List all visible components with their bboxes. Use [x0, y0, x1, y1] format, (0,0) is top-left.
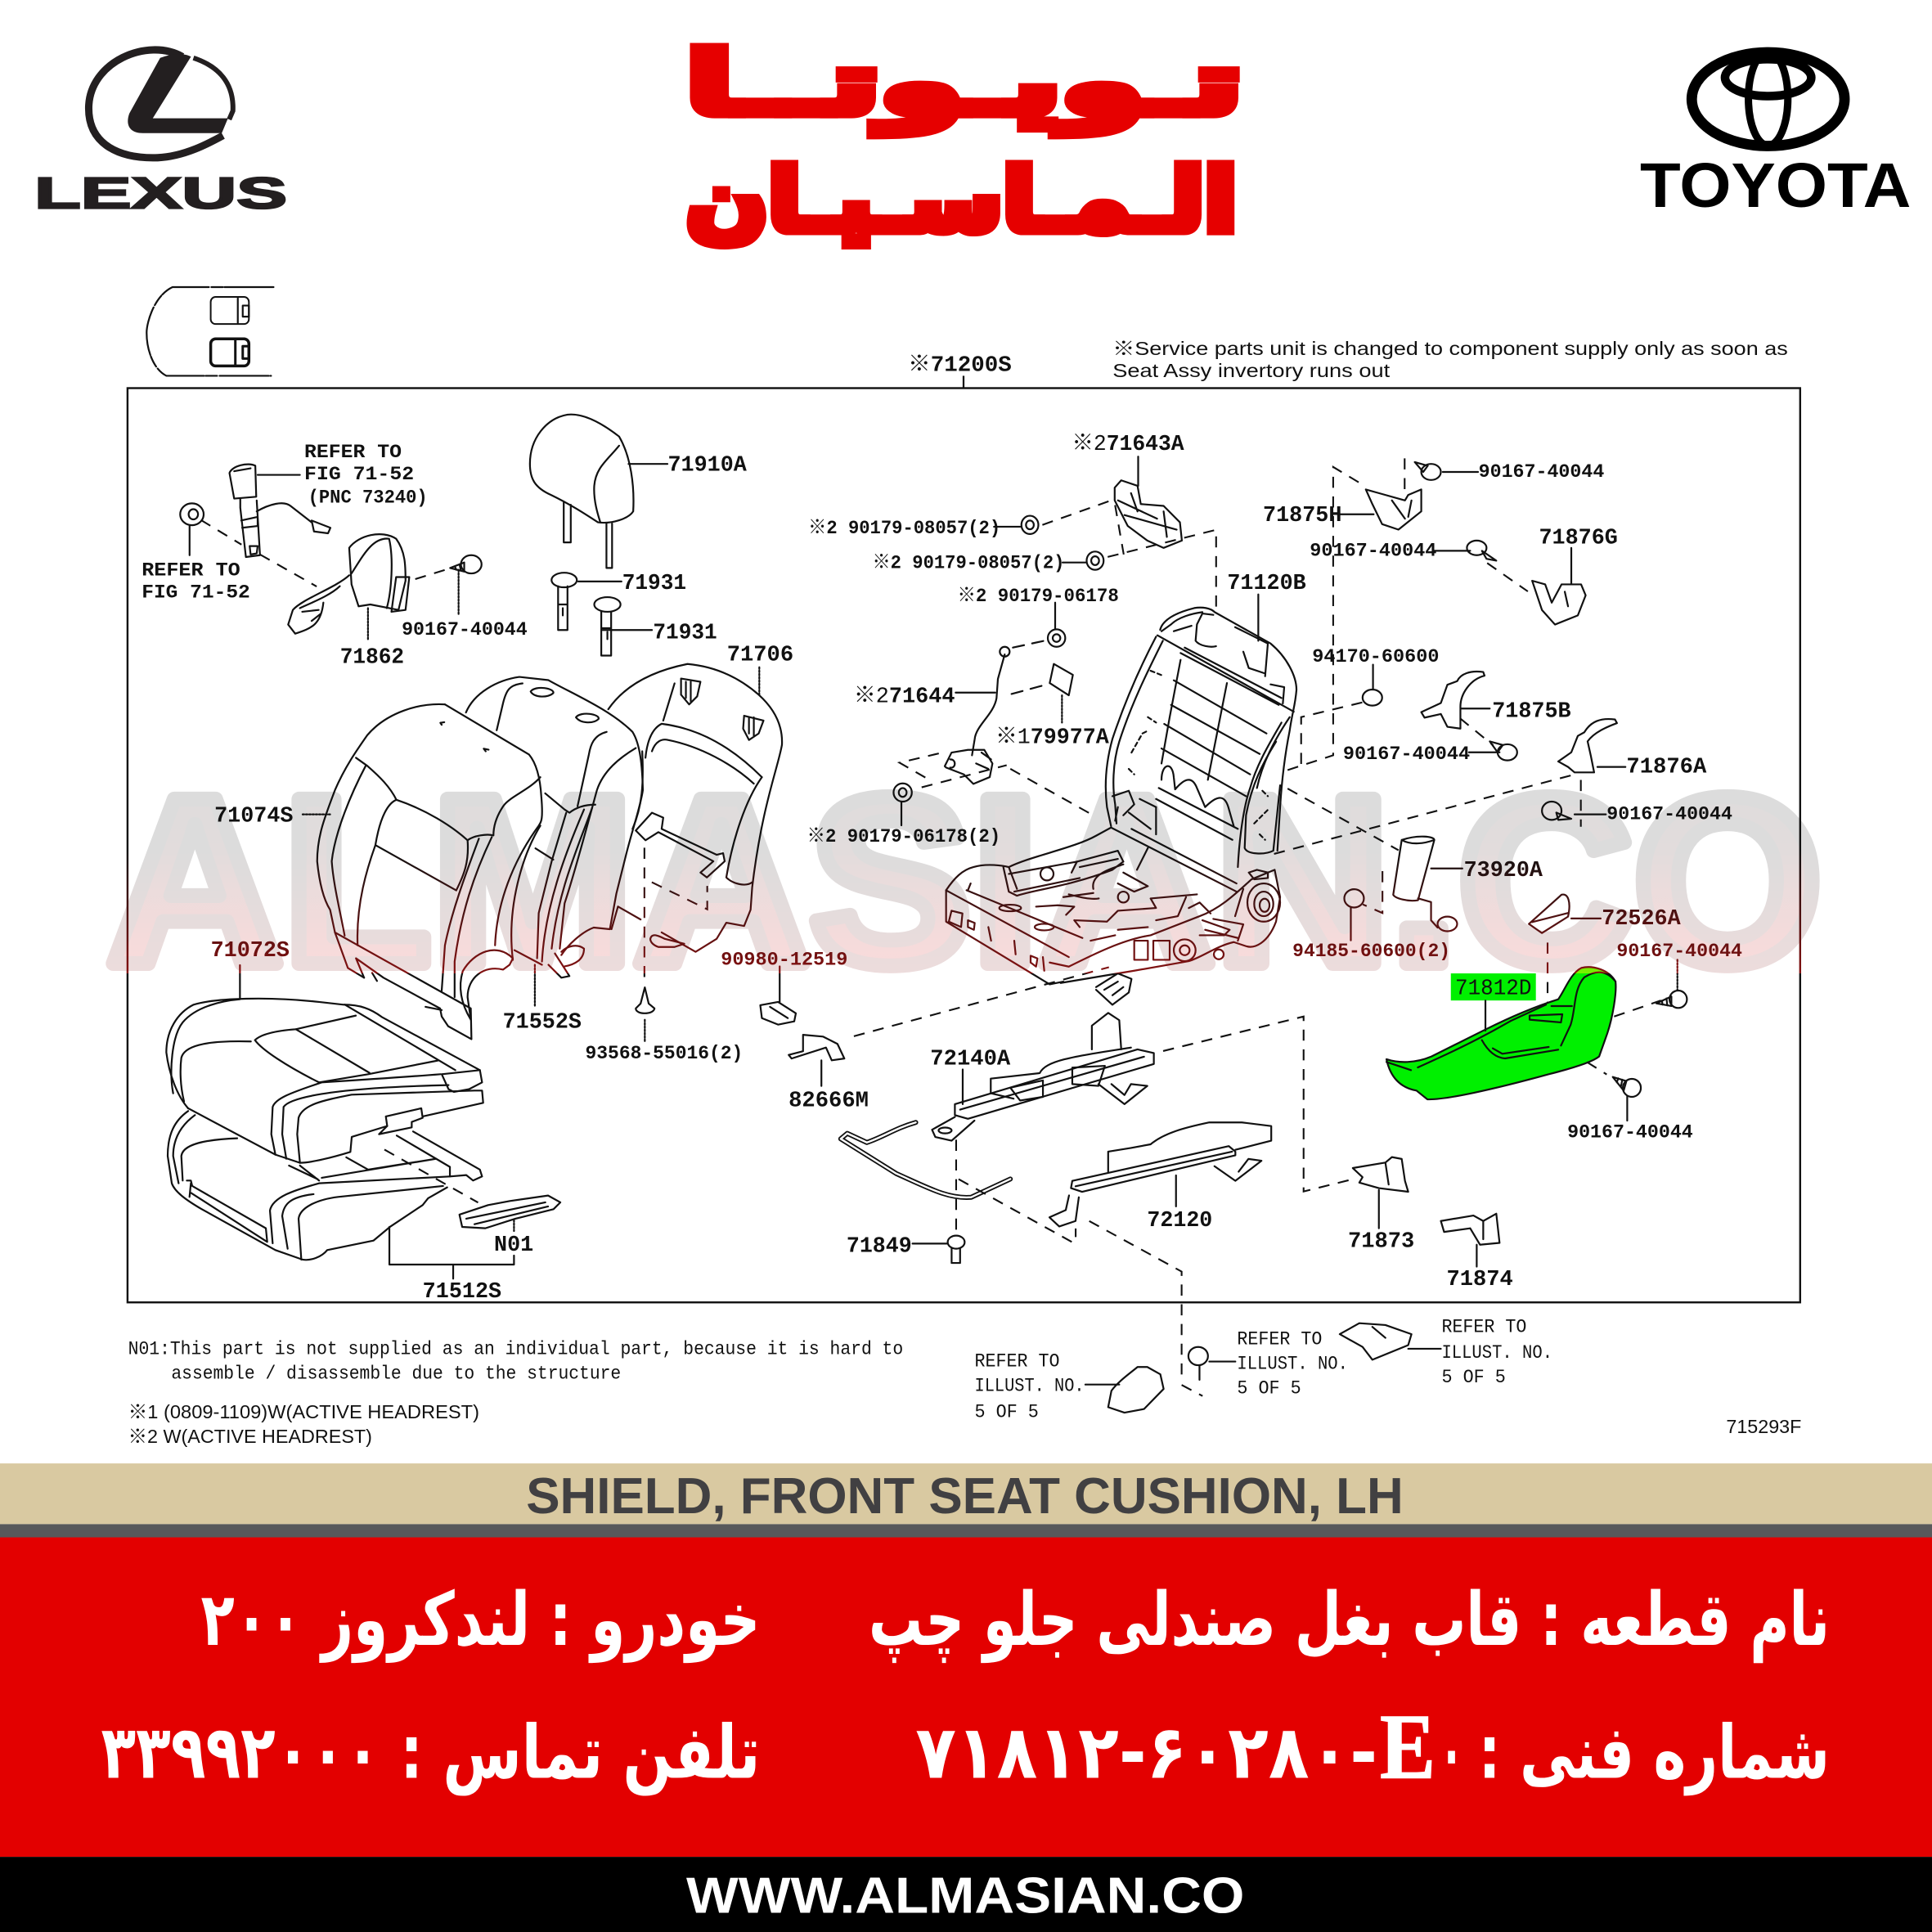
diagram code: 715293F	[1726, 1416, 1801, 1437]
part: seat back covers 71074S, 71552S, 71706	[214, 642, 847, 1065]
part: 71910A headrest and 71931 guides: 71931	[653, 620, 717, 645]
callouts: refer to illustration 5 of 5 parts: 5 OF 5	[975, 1402, 1039, 1423]
icon: seat location inset	[146, 287, 273, 375]
part: brackets 71875H, 71876G, 71875B, 71876A with bolts: 90167-40044	[1343, 744, 1470, 766]
callouts: refer to illustration 5 of 5 parts	[975, 1317, 1552, 1423]
part: seat tracks 72140A, 72120 and wire 71849: 72120	[1147, 1208, 1212, 1233]
logo: red Persian brand wordmark: تـویـوتــا	[686, 34, 1242, 135]
note: service parts: ※Service parts unit is changed to component supply only as soon as	[1112, 338, 1788, 359]
panel: red Persian details	[0, 1538, 1932, 1857]
part: brackets 71875H, 71876G, 71875B, 71876A with bolts	[1263, 458, 1732, 827]
part: brackets 71875H, 71876G, 71875B, 71876A with bolts: 90167-40044	[1310, 541, 1436, 562]
panel: red Persian details: تلفن تماس : ۳۳۹۹۲۰۰۰	[101, 1710, 760, 1796]
logo: Lexus: LEXUS	[34, 169, 287, 218]
panel: red Persian details: خودرو : لندکروز ۲۰۰	[201, 1577, 760, 1664]
part: seat belt buckle and 71862 cover: REFER TO	[142, 560, 240, 582]
callouts: refer to illustration 5 of 5 parts: ILLUST. NO.	[1237, 1355, 1348, 1376]
note: service parts: Seat Assy invertory runs out	[1112, 360, 1391, 381]
notes: N01 and footnotes: N01:This part is not supplied as an individual part, because it is hard to	[128, 1340, 903, 1361]
part: seat frame 71120B: 71120B	[1227, 571, 1306, 596]
part: 71873 and 71874 clips: 71873	[1348, 1229, 1414, 1254]
part: 71873 and 71874 clips	[1348, 1157, 1513, 1292]
part: brackets 71875H, 71876G, 71875B, 71876A with bolts: 71875H	[1263, 503, 1341, 528]
part: 71910A headrest and 71931 guides: 71931	[622, 571, 686, 596]
part: 71643A bracket with nuts: ※2 90179-08057(2)	[808, 519, 1000, 540]
part: mounting bolts for 71812D: 90167-40044	[1616, 941, 1742, 963]
part: seat belt buckle and 71862 cover: FIG 71-52	[142, 583, 250, 604]
notes: N01 and footnotes: assemble / disassemble due to the structure	[171, 1364, 621, 1386]
part: seat frame 71120B	[900, 467, 1577, 1004]
footer: website	[0, 1857, 1932, 1932]
part: 71873 and 71874 clips: 71874	[1446, 1267, 1513, 1292]
part: seat back covers 71074S, 71552S, 71706: 71074S	[214, 804, 294, 829]
footer: website: WWW.ALMASIAN.CO	[686, 1868, 1244, 1925]
label: 71200S: ※71200S	[908, 353, 1012, 378]
part: brackets 71875H, 71876G, 71875B, 71876A with bolts: 71876G	[1539, 525, 1618, 550]
part: highlighted 71812D shield, front seat cushion	[1386, 967, 1615, 1099]
callouts: refer to illustration 5 of 5 parts: ILLUST. NO.	[1441, 1343, 1552, 1364]
part: seat cushions 71072S, 71512S and N01: N01	[494, 1233, 533, 1258]
part: 71643A bracket with nuts: ※2 90179-08057(2)	[873, 553, 1065, 574]
part: seat back covers 71074S, 71552S, 71706: 71706	[727, 642, 793, 667]
watermark: ALMASIAN.CO: ALMASIAN.CO	[107, 747, 1822, 1014]
part: seat cushions 71072S, 71512S and N01	[166, 938, 560, 1305]
logo: red Persian brand wordmark	[686, 34, 1242, 251]
part: seat belt buckle and 71862 cover: (PNC 73240)	[308, 488, 428, 510]
logo: Toyota: TOYOTA	[1640, 151, 1911, 221]
notes: N01 and footnotes	[128, 1340, 903, 1447]
part: 71644 cable, 79977A card and nuts: ※2 90179-06178(2)	[807, 827, 1000, 848]
part: 73920A side airbag and 72526A cap: 72526A	[1602, 906, 1681, 932]
part: brackets 71875H, 71876G, 71875B, 71876A with bolts: 90167-40044	[1479, 462, 1604, 483]
part: seat back covers 71074S, 71552S, 71706: 93568-55016(2)	[586, 1044, 743, 1065]
notes: N01 and footnotes: ※1 (0809-1109)W(ACTIVE HEADREST)	[128, 1401, 479, 1422]
watermark tint over linework	[99, 850, 1836, 973]
part: 82666M clip and 90980-12519 connector: 82666M	[789, 1089, 869, 1114]
notes: N01 and footnotes: ※2 W(ACTIVE HEADREST)	[128, 1426, 372, 1447]
panel: red Persian details: ۰	[1439, 1710, 1464, 1796]
part: seat cushions 71072S, 71512S and N01: 71072S	[211, 938, 290, 964]
part: seat belt buckle and 71862 cover	[142, 443, 528, 670]
logo: Lexus	[34, 50, 287, 218]
part: seat cushions 71072S, 71512S and N01: 71512S	[423, 1279, 501, 1305]
part: mounting bolts for 71812D	[1567, 941, 1742, 1143]
part: seat belt buckle and 71862 cover: 71862	[340, 645, 404, 670]
part: 71644 cable, 79977A card and nuts: ※179977A	[995, 725, 1109, 750]
band: English part name: SHIELD, FRONT SEAT CUSHION, LH	[526, 1468, 1404, 1525]
panel: red Persian details: E	[1380, 1696, 1436, 1799]
part: brackets 71875H, 71876G, 71875B, 71876A with bolts: 71875B	[1492, 699, 1571, 725]
part: brackets 71875H, 71876G, 71875B, 71876A with bolts: 90167-40044	[1606, 805, 1732, 826]
part: seat tracks 72140A, 72120 and wire 71849: 71849	[847, 1233, 912, 1259]
part: brackets 71875H, 71876G, 71875B, 71876A with bolts: 94170-60600	[1312, 647, 1439, 668]
part: highlighted 71812D shield, front seat cushion: 71812D	[1455, 977, 1531, 1002]
callouts: refer to illustration 5 of 5 parts: 5 OF 5	[1237, 1379, 1301, 1400]
callouts: refer to illustration 5 of 5 parts: ILLUST. NO.	[975, 1377, 1085, 1398]
callouts: refer to illustration 5 of 5 parts: REFER TO	[1441, 1317, 1526, 1338]
callouts: refer to illustration 5 of 5 parts: 5 OF 5	[1441, 1368, 1506, 1389]
note: service parts	[1112, 338, 1788, 381]
part: 73920A side airbag and 72526A cap: 94185-60600(2)	[1292, 941, 1450, 963]
panel: parts diagram frame	[128, 389, 1800, 1302]
part: mounting bolts for 71812D: 90167-40044	[1567, 1122, 1693, 1143]
part: 71643A bracket with nuts	[808, 432, 1184, 574]
part: 71644 cable, 79977A card and nuts: ※271644	[854, 685, 955, 710]
part: seat belt buckle and 71862 cover: REFER TO	[304, 443, 402, 464]
part: seat tracks 72140A, 72120 and wire 71849: 72140A	[930, 1047, 1011, 1072]
part: 71643A bracket with nuts: ※271643A	[1072, 432, 1184, 457]
panel: red Persian details: ۷۱۸۱۲-۶۰۲۸۰-	[915, 1710, 1377, 1796]
part: 71644 cable, 79977A card and nuts: ※2 90179-06178	[957, 586, 1119, 608]
part: 73920A side airbag and 72526A cap	[1292, 837, 1681, 1022]
part: 71910A headrest and 71931 guides	[530, 415, 748, 655]
part: 71910A headrest and 71931 guides: 71910A	[667, 452, 748, 478]
part: seat belt buckle and 71862 cover: FIG 71-52	[304, 465, 414, 486]
band: English part name	[0, 1463, 1932, 1538]
logo: red Persian brand wordmark: الـمـاسـیـان	[686, 151, 1237, 251]
callouts: refer to illustration 5 of 5 parts: REFER TO	[975, 1352, 1059, 1373]
part: seat belt buckle and 71862 cover: 90167-40044	[402, 620, 528, 641]
part: seat tracks 72140A, 72120 and wire 71849	[841, 1013, 1353, 1396]
part: seat back covers 71074S, 71552S, 71706: 71552S	[503, 1009, 582, 1035]
callouts: refer to illustration 5 of 5 parts: REFER TO	[1237, 1329, 1322, 1350]
part: brackets 71875H, 71876G, 71875B, 71876A with bolts: 71876A	[1626, 754, 1707, 780]
logo: Toyota	[1640, 52, 1911, 221]
part: 73920A side airbag and 72526A cap: 73920A	[1464, 858, 1543, 883]
part: 82666M clip and 90980-12519 connector	[789, 968, 1109, 1114]
part: seat back covers 71074S, 71552S, 71706: 90980-12519	[721, 950, 847, 971]
part: 71644 cable, 79977A card and nuts	[807, 586, 1119, 848]
